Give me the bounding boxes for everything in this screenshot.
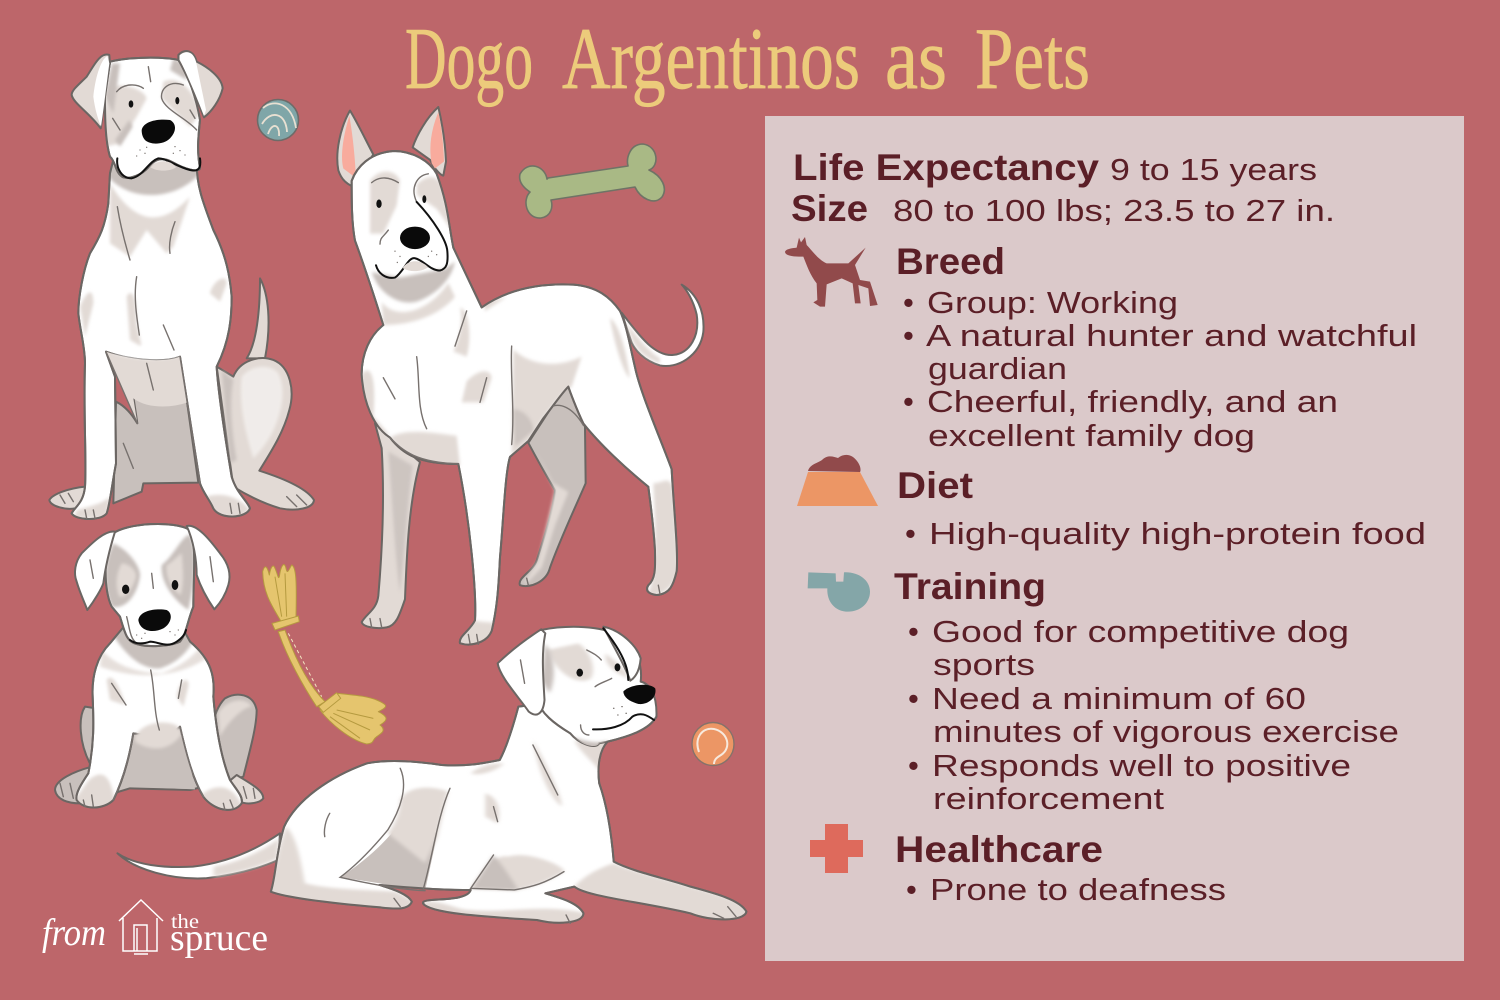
illustration: puppy (55, 524, 263, 812)
icon: medical cross (810, 824, 863, 873)
section: training: • (908, 614, 919, 649)
section: training: • (908, 748, 919, 783)
section: healthcare (895, 829, 1226, 907)
section: diet: High-quality high-protein food (929, 516, 1426, 551)
icon: house (119, 900, 163, 954)
section: breed: excellent family dog (928, 418, 1255, 453)
section: training: Need a minimum of 60 (932, 681, 1306, 716)
section: training: reinforcement (933, 781, 1164, 816)
panel: info card (765, 116, 1464, 961)
wordmark: spruce: spruce (170, 917, 268, 959)
illustration: sitting adult dog (49, 51, 314, 520)
section: training: Responds well to positive (932, 748, 1351, 783)
section: healthcare: Prone to deafness (930, 872, 1226, 907)
section: breed: • (903, 318, 914, 353)
section: diet: Diet (897, 465, 973, 506)
icon: whistle (808, 572, 870, 612)
section: breed: • (903, 384, 914, 419)
section: breed: guardian (928, 351, 1067, 386)
stat: life expectancy: 9 to 15 years (1110, 152, 1317, 187)
chest and belly shading (106, 352, 187, 423)
stat: life expectancy: Life Expectancy (793, 147, 1099, 188)
section: training (894, 566, 1399, 816)
section: training: • (908, 681, 919, 716)
title: Pets (975, 11, 1090, 108)
icon: orange tennis ball (692, 722, 734, 766)
icon: dog silhouette (785, 237, 878, 307)
stat: life expectancy (793, 147, 1317, 188)
section: training: Training (894, 566, 1046, 607)
section: breed: • (903, 285, 914, 320)
section: breed: A natural hunter and watchful (926, 318, 1417, 353)
section: training: minutes of vigorous exercise (933, 714, 1399, 749)
section: breed (896, 241, 1417, 453)
section: healthcare: Healthcare (895, 829, 1103, 870)
title: Dogo (405, 11, 533, 108)
section: breed: Cheerful, friendly, and an (927, 384, 1338, 419)
icon: striped blue ball (258, 100, 298, 140)
section: healthcare: • (906, 872, 917, 907)
section: breed: Group: Working (927, 285, 1178, 320)
stat: size: Size (791, 188, 868, 229)
section: breed: Breed (896, 241, 1005, 282)
icon: rope toy (263, 565, 386, 744)
title (405, 11, 1090, 108)
section: training: sports (933, 647, 1035, 682)
stat: size (791, 188, 1335, 229)
section: training: Good for competitive dog (932, 614, 1349, 649)
script word: from: from (42, 912, 106, 954)
title: as (885, 11, 947, 108)
wordmark: the: the (171, 911, 199, 933)
section: diet: • (905, 516, 916, 551)
title: Argentinos (562, 11, 860, 108)
illustration: standing dog (337, 107, 704, 648)
logo: from the spruce (42, 900, 268, 959)
icon: food bowl (797, 455, 878, 506)
illustration: lying dog (117, 627, 751, 926)
icon: green bone (520, 144, 664, 218)
section: diet (897, 465, 1426, 551)
stat: size: 80 to 100 lbs; 23.5 to 27 in. (893, 193, 1335, 228)
